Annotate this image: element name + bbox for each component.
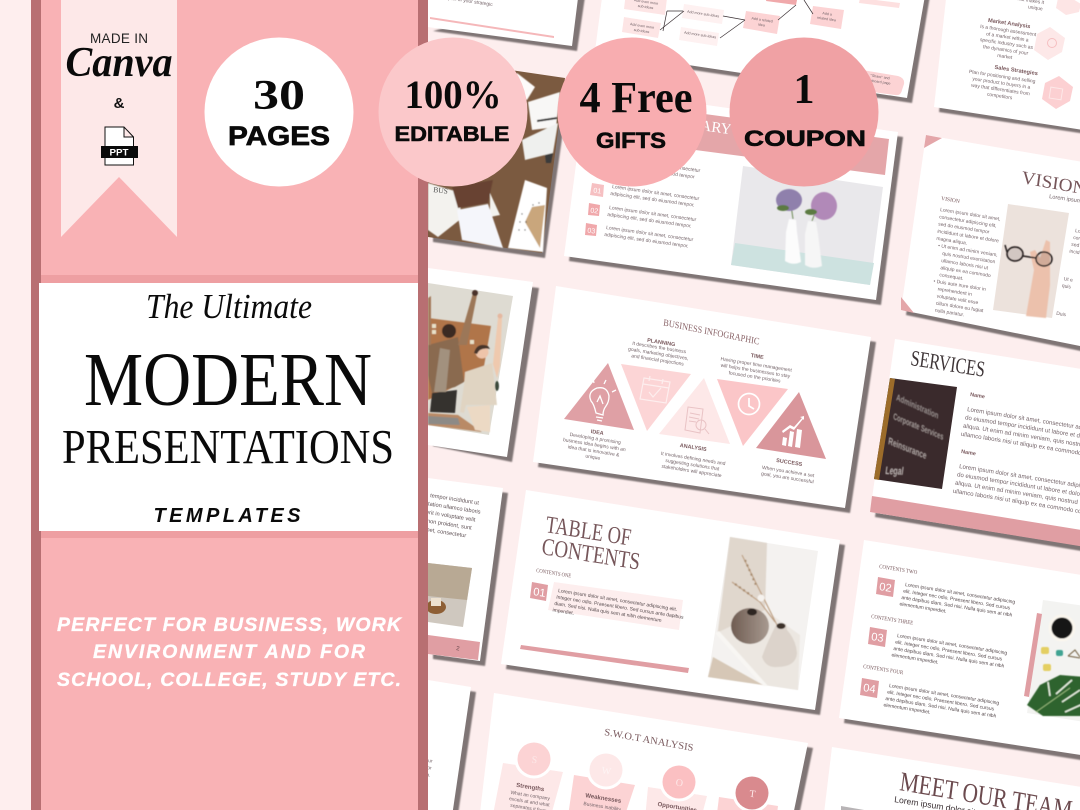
contents three: ante dapibus diam. Sed nisi. Nulla quis sem at nibh	[893, 646, 1005, 670]
analysis label	[659, 443, 726, 480]
services photo: Legal	[885, 465, 904, 478]
toc title	[540, 511, 642, 576]
success label: SUCCESS	[776, 458, 803, 468]
sales strategies text: way that differentiates from	[971, 83, 1030, 97]
tagline: ENVIRONMENT AND FOR	[93, 641, 365, 663]
pink footer bar	[870, 496, 1080, 549]
contents two: ante dapibus diam. Sed nisi. Nulla quis sem at nibh	[901, 595, 1013, 619]
right column text: incid	[1069, 249, 1080, 256]
vision paragraph: incididunt ut labore et dolore	[937, 229, 999, 244]
accent line	[430, 17, 554, 38]
vision bullets: quis nostrud exercitation	[942, 251, 996, 265]
second service: aliqua. Ut enim ad minim veniam, quis nostrud	[955, 481, 1078, 506]
services heading: SERVICES	[909, 345, 987, 382]
candle photo	[426, 563, 472, 627]
strengths card: S	[531, 755, 538, 766]
badge: 4 free gifts	[558, 38, 706, 186]
item 02: 02	[590, 208, 599, 216]
lower band	[41, 531, 418, 538]
toc paragraph: Integer nec odio. Praesent libero. Sed cursus ante dapibus	[556, 594, 684, 621]
slide: mind map: idea	[758, 23, 766, 28]
pink rule	[520, 645, 689, 673]
triangle: idea	[564, 363, 634, 430]
tagline	[57, 614, 403, 691]
analysis label: It involves defining needs and	[661, 451, 726, 467]
icon: calendar	[640, 376, 670, 403]
vision bullets: ullamco laboris nisi ut	[941, 258, 989, 272]
strengths card: What an company	[510, 790, 551, 802]
time label	[719, 353, 793, 386]
services photo: Corporate Services	[893, 410, 944, 442]
slide: mind map: related idea	[817, 16, 837, 23]
time label: will helps the businesses to stay	[720, 363, 791, 380]
item 01	[590, 183, 700, 209]
intro text: Lorem ipsum dolor sit amet, consectetur	[613, 156, 701, 174]
slide: mind map: sub-ideas	[633, 28, 650, 34]
partial heading: BUS	[433, 185, 448, 196]
canva wordmark: Canva	[66, 40, 172, 86]
paragraph text: amet, consectetur	[421, 526, 467, 539]
badge: 1 coupon: 1	[794, 67, 814, 113]
slide: meet our team	[822, 747, 1080, 810]
toc paragraph: Lorem ipsum dolor sit amet, consectetur adipiscing elit.	[558, 588, 677, 613]
market analysis text: of a market within a	[986, 31, 1029, 44]
services photo	[874, 378, 957, 489]
intro text: adipiscing elit, sed do eiusmod tempor	[611, 163, 695, 181]
planning label	[627, 338, 690, 368]
vision bullets: nulla pariatur.	[934, 308, 965, 318]
first service	[960, 392, 1080, 462]
item 01: 01	[532, 586, 546, 600]
contents four: CONTENTS FOUR	[863, 664, 904, 676]
idea label: Developing a promising	[569, 432, 621, 446]
slide: team celebration	[428, 268, 533, 457]
icon: clock	[738, 394, 760, 414]
slide: market analysis	[934, 0, 1080, 131]
badge: 100% editable	[378, 38, 528, 186]
time label: TIME	[750, 353, 764, 361]
mind map boxes	[622, 0, 904, 95]
mind map labels: sub-ideas	[637, 4, 654, 10]
contents three: Lorem ipsum dolor sit amet, consectetur adipiscing	[897, 633, 1008, 657]
slide: services	[870, 339, 1080, 549]
slide: paragraph and candle	[421, 478, 503, 661]
vision bullets: • Duis aute irure dolor in	[933, 279, 986, 293]
strengths card: Strengths	[516, 783, 545, 793]
item 01: Lorem ipsum dolor sit amet, consectetur	[612, 184, 700, 202]
slide: mind map: Add more sub-ideas	[684, 31, 717, 39]
badge: 100% editable: EDITABLE	[394, 122, 510, 146]
weaknesses card	[566, 750, 635, 810]
badge: 30 pages: 30	[253, 73, 305, 119]
title: modern: MODERN	[84, 338, 372, 422]
partial text: ur	[428, 758, 433, 765]
market analysis text: market	[997, 53, 1013, 61]
market analysis text: the dynamics of your	[983, 44, 1029, 57]
strengths card: excels at and what	[509, 796, 551, 809]
paragraph text: t non proident, sunt	[423, 518, 472, 532]
idea label: business idea begins with an	[563, 437, 626, 453]
vision bullets: • Ut enim ad minim veniam,	[938, 243, 998, 259]
triangle: time	[717, 379, 788, 446]
triangle: success	[756, 392, 826, 459]
weaknesses card: W	[601, 765, 612, 778]
item 03	[585, 223, 694, 250]
services photo: Reinsurance	[888, 436, 927, 462]
page number: 2	[456, 646, 460, 653]
item 03: adipiscing elit, sed do eiusmod tempor.	[604, 232, 689, 250]
planning label: goals, marketing objectives,	[628, 346, 689, 362]
contents three: CONTENTS THREE	[871, 614, 914, 627]
second service: Name	[961, 449, 976, 457]
item 01: adipiscing elit, sed do eiusmod tempor.	[610, 191, 695, 209]
contents three: elit. Integer nec odio. Praesent libero. Sed cursus	[895, 639, 1003, 663]
time label: focused on the priorities	[728, 370, 781, 385]
second service	[952, 449, 1080, 519]
title: presentations: PRESENTATIONS	[62, 419, 394, 474]
slide: mind map: onboard page	[868, 78, 891, 86]
contents two: CONTENTS TWO	[879, 564, 918, 576]
vision paragraph: magna aliqua.	[936, 236, 967, 247]
idea label: idea that is innovative &	[567, 444, 620, 459]
toc title: CONTENTS	[540, 533, 642, 576]
idea label	[561, 429, 627, 466]
slide: top left partial	[420, 0, 579, 46]
infographic title: BUSINESS INFOGRAPHIC	[663, 318, 760, 348]
opportunities card: O	[675, 778, 684, 790]
analysis label: stakeholders will appreciate	[661, 464, 722, 479]
pink footer bar	[428, 635, 480, 660]
team photo edge	[841, 806, 870, 810]
paragraph text: tempor incididunt ut	[430, 493, 480, 507]
slide: mind map: "Share" and	[870, 74, 890, 80]
badge: 1 coupon	[730, 38, 878, 186]
slide: vision	[901, 135, 1080, 350]
vision paragraph: consectetur adipiscing elit,	[939, 214, 997, 229]
threats card: T	[749, 789, 756, 800]
slide: swot analysis	[478, 693, 808, 810]
partial text: or	[427, 765, 432, 772]
slide: mind map: Add a	[822, 11, 833, 17]
slide: table of contents	[501, 490, 840, 710]
paragraph text: tation ullamco laboris	[428, 501, 481, 516]
item 03: 03	[587, 228, 596, 236]
tagline: PERFECT FOR BUSINESS, WORK	[57, 614, 403, 636]
vase photo	[708, 537, 818, 690]
item 03: Lorem ipsum dolor sit amet, consectetur	[606, 225, 694, 243]
item 01: 01	[593, 188, 602, 196]
slide: mind map	[595, 0, 926, 98]
contents two: 02	[878, 581, 892, 595]
made in label: MADE IN	[90, 31, 148, 46]
item 02: Lorem ipsum dolor sit amet, consectetur	[609, 205, 697, 223]
header text: ARY	[699, 118, 732, 138]
market analysis heading: Market Analysis	[988, 18, 1031, 30]
badge: 30 pages: PAGES	[228, 121, 330, 151]
item 01	[530, 582, 548, 601]
slide: contents two to four	[839, 540, 1080, 758]
title: templates: TEMPLATES	[154, 505, 301, 527]
opportunities card	[644, 762, 707, 810]
contents four: 04	[862, 682, 876, 696]
slide: bottom left partial	[426, 680, 471, 810]
contents four: elit. Integer nec odio. Praesent libero. Sed cursus	[887, 689, 995, 713]
planning label: PLANNING	[647, 338, 676, 348]
corner accents	[901, 135, 942, 313]
desk photo details	[428, 73, 560, 252]
right column text: Duis	[1056, 311, 1067, 318]
slide: summary	[564, 88, 898, 300]
header band	[680, 112, 889, 175]
vision bullets: voluptate velit esse	[936, 294, 979, 306]
slide: desk photo	[428, 58, 565, 253]
services photo: Administration	[896, 392, 939, 422]
market analysis text: specific industry such as	[980, 37, 1034, 51]
contents four	[860, 664, 1000, 726]
hexagon icons	[1034, 0, 1080, 109]
celebration photo	[428, 283, 513, 435]
upper band	[41, 275, 418, 283]
toc paragraph: imperdiet.	[552, 607, 574, 617]
item 02	[588, 203, 697, 230]
icon: growth chart	[782, 416, 804, 448]
slide: mind map: Add a related	[751, 16, 773, 24]
planning label: and financial projections	[631, 353, 685, 368]
contents three: elementum imperdiet.	[891, 652, 939, 666]
success label	[761, 458, 815, 485]
sales strategies text: your product to buyers in a	[972, 76, 1031, 91]
vision bullets: consequat.	[939, 272, 964, 282]
badge: 4 free gifts: 4 Free	[580, 73, 692, 122]
triangle: planning	[621, 364, 691, 431]
item 02: adipiscing elit, sed do eiusmod tempor.	[607, 212, 692, 230]
left strip background	[0, 0, 31, 810]
ampersand: &	[114, 95, 125, 112]
paragraph text: erit in voluptate velit	[426, 510, 476, 524]
icon: document search	[685, 407, 709, 434]
badge: 1 coupon: COUPON	[744, 126, 866, 151]
badge: 100% editable: 100%	[404, 72, 502, 117]
icon: light bulb	[583, 379, 616, 421]
partial text: a.	[426, 773, 431, 779]
idea label: IDEA	[590, 429, 604, 437]
icon: ppt file	[101, 127, 138, 165]
strengths card	[490, 740, 563, 810]
hand with glasses photo	[993, 204, 1069, 318]
sales strategies text: competitors	[987, 92, 1013, 101]
vision bullets: aliquip ex ea commodo	[940, 265, 991, 279]
tagline: SCHOOL, COLLEGE, STUDY ETC.	[57, 669, 401, 691]
contents one label: CONTENTS ONE	[536, 568, 572, 580]
swot title: S.W.O.T ANALYSIS	[604, 727, 694, 754]
sales strategies text: Plan for positioning and selling	[969, 69, 1036, 85]
contents three	[868, 614, 1008, 676]
slide: mind map: Add even more	[630, 22, 655, 30]
intro text: incididunt ut labore et	[609, 170, 657, 182]
analysis label: suggesting solutions that	[665, 458, 720, 473]
vision label: VISION	[941, 196, 960, 205]
sales strategies heading: Sales Strategies	[994, 65, 1038, 77]
icon: ppt file: PPT	[110, 148, 129, 158]
success label: goal, you are successful	[761, 471, 814, 485]
left panel	[31, 0, 428, 810]
right column text: quis	[1061, 283, 1072, 291]
threats card	[715, 774, 778, 810]
vision bullets: cillum dolore eu fugiat	[935, 301, 984, 314]
title card	[39, 283, 418, 531]
first service: Name	[970, 392, 985, 400]
contents three: 03	[870, 631, 884, 645]
contents four: elementum imperdiet.	[883, 702, 931, 716]
market analysis text: Is a thorough assessment	[980, 24, 1037, 38]
right column text: Ut e	[1063, 276, 1073, 284]
coffee and leaf photo	[1024, 600, 1080, 722]
slide: mind map: Add more sub-ideas	[687, 10, 720, 18]
pale text band	[548, 582, 683, 630]
ribbon	[61, 0, 177, 237]
success label: When you achieve a set	[762, 465, 815, 479]
slide: business infographic	[533, 286, 871, 508]
contents two: Lorem ipsum dolor sit amet, consectetur adipiscing	[905, 582, 1016, 606]
toc title: TABLE OF	[544, 511, 633, 552]
title: the ultimate: The Ultimate	[146, 287, 312, 326]
badge: 30 pages	[204, 38, 354, 186]
triangle: analysis	[659, 378, 730, 444]
summary photo	[731, 166, 883, 285]
vision paragraph: Lorem ipsum dolor sit amet,	[940, 207, 1001, 223]
contents two: elit. Integer nec odio. Praesent libero. Sed cursus	[903, 588, 1011, 612]
contents four: ante dapibus diam. Sed nisi. Nulla quis sem at nibh	[885, 696, 997, 720]
vision bullets: reprehenderit in	[937, 286, 972, 298]
planning label: It describes the business	[632, 341, 687, 355]
contents two: elementum imperdiet.	[899, 601, 947, 615]
panel frame	[31, 0, 428, 810]
slide shadows	[433, 0, 1080, 810]
toc paragraph: diam. Sed nisi. Nulla quis sem at nibh elementum	[554, 601, 662, 624]
vision paragraph: sed do eiusmod tempor	[938, 221, 990, 236]
top text: unique	[1028, 4, 1043, 13]
idea label: unique	[585, 453, 601, 462]
panel fill	[41, 0, 418, 810]
analysis label: ANALYSIS	[679, 443, 707, 453]
badge: 4 free gifts: GIFTS	[596, 128, 666, 153]
contents two	[876, 564, 1016, 625]
weaknesses card: Weaknesses	[585, 793, 622, 805]
contents four: Lorem ipsum dolor sit amet, consectetur adipiscing	[889, 683, 1000, 707]
time label: Having proper time management	[720, 356, 793, 374]
